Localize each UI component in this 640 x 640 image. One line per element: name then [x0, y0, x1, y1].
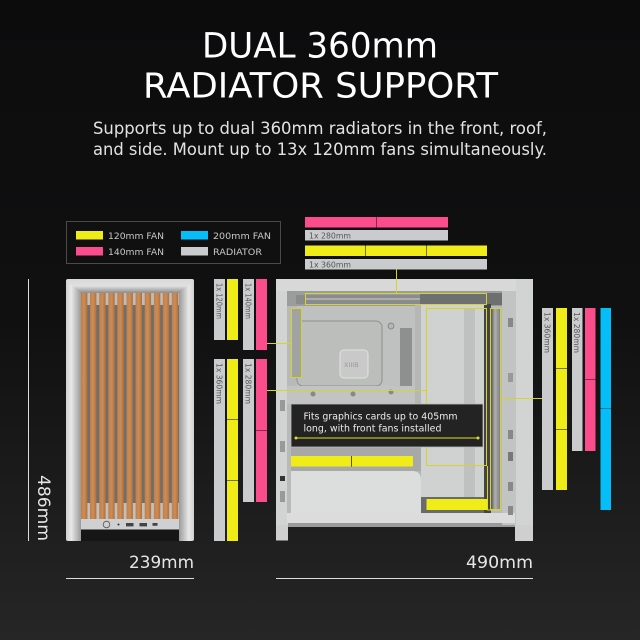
top roof bars: 1x 360mm: [309, 260, 351, 270]
case side view: [276, 279, 533, 541]
subtitle: and side. Mount up to 13x 120mm fans simultaneously.: [93, 140, 547, 160]
subtitle: [93, 119, 547, 160]
psu pocket: [421, 497, 490, 513]
left front bars 120 and 140: 1x 140mm: [244, 283, 252, 319]
depth dimension 490mm: 490mm: [466, 553, 533, 573]
gpu callout: [291, 404, 483, 447]
legend: 120mm FAN: [108, 232, 164, 242]
dark recess below front panel: [81, 529, 179, 541]
top roof bars: [305, 217, 487, 270]
yellow mount outlines: [267, 269, 542, 510]
gpu callout: long, with front fans installed: [304, 424, 442, 434]
gpu callout: Fits graphics cards up to 405mm: [304, 412, 458, 422]
side radiator bay: [484, 304, 491, 513]
io bar: [81, 519, 179, 530]
right side bars: 1x 360mm: [542, 312, 552, 353]
left front bars 360 and 280: 1x 360mm: [214, 363, 224, 404]
centre pane: [421, 305, 484, 498]
roof bay: [287, 291, 502, 306]
left front bars 360 and 280: [214, 359, 267, 541]
front fan bay: [291, 308, 302, 378]
front panel of case: [66, 279, 194, 541]
gpu slot below callout: [291, 447, 421, 471]
motherboard tray: [297, 306, 421, 404]
right side bars: [542, 308, 611, 510]
top roof bars: 1x 280mm: [309, 232, 351, 240]
case side view: XIIIB: [344, 361, 359, 369]
title: [143, 26, 499, 106]
legend: 140mm FAN: [108, 248, 164, 258]
height dimension: 486mm: [33, 475, 53, 541]
right side bars: 1x 280mm: [572, 312, 581, 353]
left front bars 120 and 140: 1x 120mm: [214, 283, 224, 319]
subtitle: Supports up to dual 360mm radiators in the front, roof,: [93, 119, 547, 139]
psu shroud: [291, 471, 421, 513]
bottom rail: [287, 513, 515, 523]
width dimension 239mm: [66, 553, 194, 579]
legend: 200mm FAN: [213, 232, 271, 242]
title: DUAL 360mm: [202, 26, 438, 66]
title: RADIATOR SUPPORT: [143, 66, 499, 106]
bottom fan bars: [291, 456, 488, 510]
legend: [66, 222, 280, 264]
width dimension 239mm: 239mm: [129, 553, 194, 573]
left front bars 120 and 140: [214, 279, 267, 350]
rear slots: [508, 318, 513, 327]
left front bars 360 and 280: 1x 280mm: [244, 363, 252, 404]
case frame: [276, 279, 533, 525]
legend: RADIATOR: [213, 248, 262, 258]
